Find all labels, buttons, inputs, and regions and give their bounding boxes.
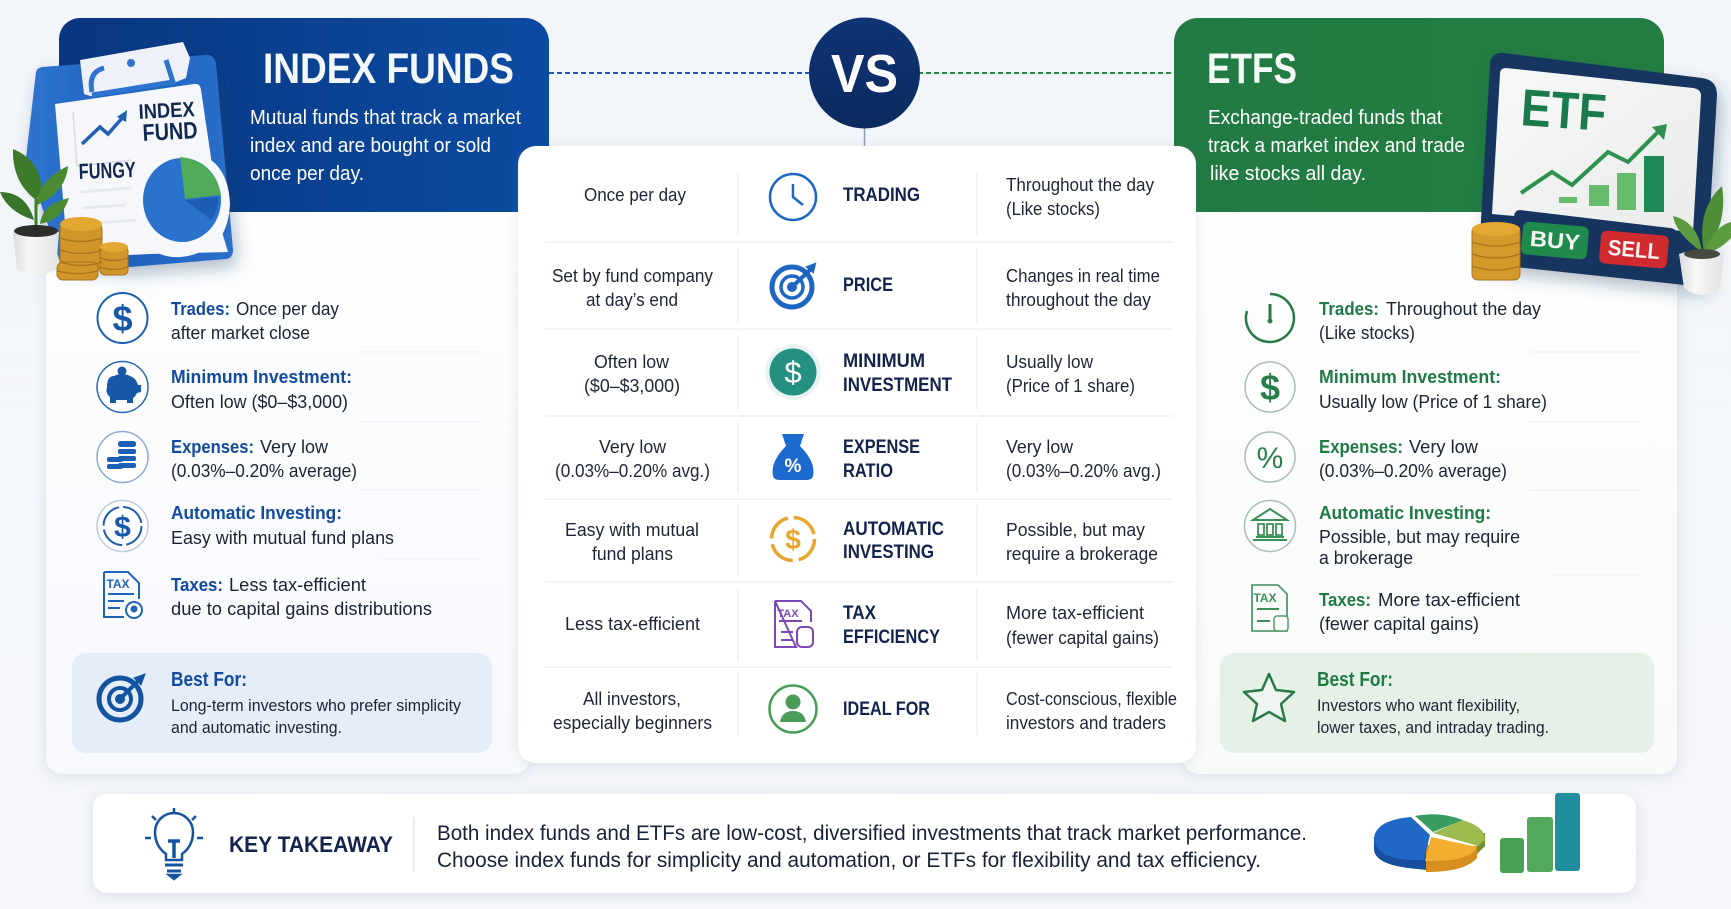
item: expenses: Expenses:: [171, 436, 254, 457]
item: automatic investing: $: [114, 511, 131, 544]
description: ETFs: [1208, 107, 1465, 185]
connector: green dashed line: [918, 72, 1174, 74]
icon: cycle dollar: $: [785, 524, 801, 555]
row: automatic investing: INVESTING: [843, 541, 934, 563]
pot: [13, 228, 59, 275]
item: minimum investment: [97, 362, 352, 412]
illustration: left plant and coins: [0, 149, 128, 280]
connector: blue dashed line: [549, 72, 812, 74]
paper: [55, 84, 228, 258]
item: minimum investment: Minimum Investment:: [1319, 366, 1501, 387]
row: tax efficiency: EFFICIENCY: [843, 626, 940, 648]
leaves: [13, 149, 41, 200]
button tray: [1514, 210, 1677, 278]
coins: [57, 224, 128, 280]
description: index funds: once per day.: [250, 163, 364, 185]
pie on paper: [135, 150, 230, 257]
title: ETFS: ETFS: [1207, 45, 1297, 93]
callout: best for index funds: and automatic investing.: [171, 719, 342, 737]
clipboard label 2: FUND: [142, 117, 198, 147]
clipboard board: [26, 55, 233, 267]
row: automatic investing: [565, 518, 1158, 564]
tablet frame: [1479, 53, 1717, 286]
row: minimum investment: [584, 344, 1135, 400]
callout: best for ETFs: [1220, 653, 1654, 753]
panel: key takeaway: [93, 793, 1636, 893]
left list dividers: [360, 352, 480, 559]
item: trades: after market close: [171, 322, 310, 343]
row: ideal for: especially beginners: [553, 713, 712, 733]
icon: target: [772, 264, 815, 307]
item: trades: Once per day: [236, 298, 340, 319]
row: trading: (Like stocks): [1006, 199, 1100, 219]
icon: person: [770, 686, 816, 732]
icon: tax document: [775, 601, 813, 647]
BUY button: BUY: [1529, 226, 1581, 255]
item: automatic investing: Automatic Investing:: [171, 502, 342, 523]
row: trading: [584, 174, 1154, 220]
label: MINIMUM: [843, 350, 925, 372]
label: AUTOMATIC: [843, 518, 944, 540]
left value: All investors,: [583, 689, 681, 709]
row: minimum investment: INVESTMENT: [843, 374, 952, 396]
description: ETFs: like stocks all day.: [1210, 163, 1366, 185]
description: ETFs: track a market index and trade: [1208, 135, 1465, 157]
tablet line chart: [1521, 130, 1660, 193]
header: index funds: [59, 18, 549, 212]
item: trades: (Like stocks): [1319, 322, 1415, 343]
item: minimum investment: $: [1260, 367, 1280, 408]
title: index funds: INDEX FUNDS: [263, 45, 514, 93]
icon: cycle dollar: [772, 518, 814, 560]
icon: 3D bars: [1500, 793, 1580, 873]
ETF text: ETF: [1519, 79, 1608, 143]
right value: More tax-efficient: [1006, 603, 1144, 623]
left value: Less tax-efficient: [565, 614, 700, 634]
icon: money bag: %: [785, 456, 802, 477]
callout: best for ETFs: Best For:: [1317, 669, 1393, 691]
item: taxes: Taxes:: [1319, 589, 1371, 610]
label: TRADING: [843, 184, 920, 206]
icon: money bag: [773, 434, 813, 480]
VS badge: VS: [831, 44, 898, 104]
right value: Usually low: [1006, 352, 1094, 372]
item: automatic investing: [1244, 500, 1520, 568]
item: trades: Trades:: [1319, 298, 1379, 319]
item: trades: Throughout the day: [1386, 298, 1542, 319]
clipboard label: INDEX: [138, 98, 195, 124]
label: PRICE: [843, 274, 893, 296]
item: minimum investment: [1245, 362, 1547, 412]
left value: Often low: [594, 352, 670, 372]
item: taxes: More tax-efficient: [1378, 589, 1520, 610]
BUY button: [1521, 221, 1589, 260]
panel: index funds details background: [46, 190, 530, 774]
row: price: throughout the day: [1006, 290, 1151, 310]
takeaway text: Both index funds and ETFs are low-cost, diversified investments that track market performance.: [437, 822, 1307, 845]
row: price: at day’s end: [586, 290, 678, 310]
item: taxes: due to capital gains distributions: [171, 598, 432, 619]
table dividers: [545, 172, 1172, 735]
icon: star: [1244, 674, 1294, 721]
left value: Very low: [599, 437, 667, 457]
connector: tick below VS: [864, 126, 866, 148]
paper lines: [80, 188, 136, 224]
left value: Set by fund company: [552, 266, 713, 286]
callout: best for index funds: Long-term investors who prefer simplicity: [171, 697, 462, 715]
row: minimum investment: ($0–$3,000): [584, 376, 680, 396]
left value: Once per day: [584, 185, 686, 205]
VS badge: [809, 18, 920, 128]
icon: teal dollar: $: [784, 355, 802, 390]
label: TAX: [843, 602, 876, 624]
description: index funds: index and are bought or sold: [250, 135, 491, 157]
item: trades: [1246, 294, 1542, 343]
row: tax efficiency: (fewer capital gains): [1006, 628, 1159, 648]
icon: 3D pie chart: [1374, 814, 1485, 872]
item: expenses: [1245, 432, 1507, 482]
item: expenses: Very low: [260, 436, 329, 457]
item: automatic investing: [97, 500, 394, 552]
item: automatic investing: Possible, but may require: [1319, 526, 1520, 547]
label: IDEAL FOR: [843, 698, 930, 720]
item: expenses: (0.03%–0.20% average): [1319, 460, 1507, 481]
clip: [80, 42, 190, 96]
row: tax efficiency: [565, 601, 1159, 648]
SELL button: [1599, 230, 1669, 269]
item: minimum investment: Usually low (Price of 1 share): [1319, 391, 1547, 412]
description: ETFs: Exchange-traded funds that: [1208, 107, 1442, 129]
label: EXPENSE: [843, 436, 920, 458]
right value: Changes in real time: [1006, 266, 1160, 286]
row: automatic investing: fund plans: [592, 544, 673, 564]
list: ETF features: [1244, 294, 1547, 634]
item: automatic investing: Easy with mutual fund plans: [171, 527, 394, 548]
item: trades: $: [112, 298, 133, 339]
row: ideal for: investors and traders: [1006, 713, 1166, 733]
item: expenses: Expenses:: [1319, 436, 1403, 457]
callout: best for ETFs: Investors who want flexibility,: [1317, 697, 1520, 715]
item: expenses: [97, 432, 357, 482]
row: expense ratio: (0.03%–0.20% avg.): [1006, 461, 1161, 481]
icon: clock: [770, 174, 816, 220]
right plant: [1673, 216, 1702, 252]
icon: tax document: TAX: [777, 608, 799, 620]
item: expenses: Very low: [1409, 436, 1479, 457]
clipboard label 3: FUNGY: [78, 157, 136, 184]
small chart on paper: [73, 112, 131, 166]
panel: comparison table card: [518, 146, 1196, 763]
callout: best for index funds: Best For:: [171, 669, 247, 691]
panel: ETF details background: [1183, 190, 1677, 774]
item: taxes: Less tax-efficient: [229, 574, 366, 595]
right pot: [1679, 250, 1724, 295]
item: taxes: TAX: [1253, 591, 1277, 605]
row: expense ratio: RATIO: [843, 460, 893, 482]
icon: target: [99, 674, 145, 720]
row: expense ratio: [555, 434, 1161, 482]
row: expense ratio: (0.03%–0.20% avg.): [555, 461, 710, 481]
row: price: [552, 264, 1160, 310]
item: taxes: (fewer capital gains): [1319, 613, 1479, 634]
panel: key takeaway: Choose index funds for simplicity and automation, or ETFs for flexibility and tax efficiency.: [437, 849, 1261, 872]
icon: light bulb: [145, 808, 203, 879]
item: trades: Trades:: [171, 298, 230, 319]
item: expenses: %: [1257, 442, 1283, 475]
item: taxes: Taxes:: [171, 574, 223, 595]
item: automatic investing: Automatic Investing:: [1319, 502, 1491, 523]
description: index funds: [250, 107, 521, 185]
item: minimum investment: Often low ($0–$3,000): [171, 391, 348, 412]
illustration: clipboard: [26, 42, 233, 267]
heading: key takeaway: KEY TAKEAWAY: [229, 832, 393, 857]
item: taxes: TAX: [106, 577, 130, 591]
item: automatic investing: a brokerage: [1319, 547, 1413, 568]
item: minimum investment: Minimum Investment:: [171, 366, 352, 387]
description: index funds: Mutual funds that track a market: [250, 107, 521, 129]
left value: Easy with mutual: [565, 520, 699, 540]
callout: best for ETFs: lower taxes, and intraday trading.: [1317, 719, 1549, 737]
right value: Very low: [1006, 437, 1074, 457]
right value: Throughout the day: [1006, 175, 1154, 195]
list: index fund features: [97, 293, 432, 619]
callout: best for index funds: [72, 653, 492, 753]
illustration: ETF tablet: [1472, 53, 1731, 295]
item: expenses: (0.03%–0.20% average): [171, 460, 357, 481]
right value: Cost-conscious, flexible: [1006, 689, 1177, 709]
row: ideal for: [553, 686, 1177, 733]
right coins: [1472, 226, 1520, 280]
item: taxes: [1252, 585, 1520, 634]
icon: teal dollar: [765, 344, 821, 400]
row: minimum investment: (Price of 1 share): [1006, 376, 1135, 396]
item: trades: [98, 293, 340, 343]
right list dividers: [1530, 352, 1640, 575]
SELL button: SELL: [1607, 235, 1661, 264]
item: taxes: [104, 572, 432, 619]
row: automatic investing: require a brokerage: [1006, 544, 1158, 564]
tablet bars: [1559, 197, 1577, 203]
header: ETFs: [1174, 18, 1664, 212]
right value: Possible, but may: [1006, 520, 1145, 540]
tablet screen: [1492, 68, 1701, 232]
